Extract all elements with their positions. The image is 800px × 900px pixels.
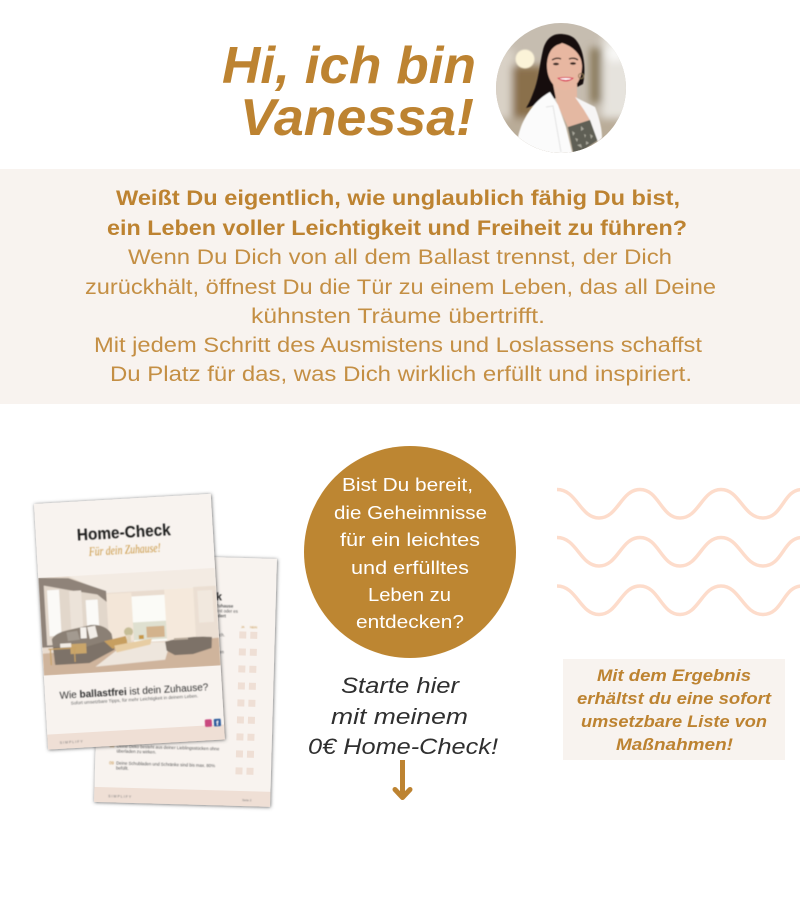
home-check back page: 09 (109, 760, 115, 765)
home-check back page: überladen zu wirken. (116, 749, 156, 755)
home-check front page: f (216, 720, 220, 727)
home-check back page: befüllt. (116, 766, 129, 771)
intro body text: Wenn Du Dich von all dem Ballast trennst, der Dich (128, 246, 672, 269)
home-check back page: NEIN (250, 625, 257, 629)
home-check back page: k (216, 591, 223, 603)
call to action text (308, 673, 498, 759)
intro body text: Du Platz für das, was Dich wirklich erfüllt und inspiriert. (110, 363, 692, 386)
cover heading: Für dein Zuhause! (88, 540, 161, 559)
home-check back page: Seite 2 (242, 798, 252, 802)
question circle: Bist Du bereit, (342, 475, 473, 495)
home-check front page (34, 494, 225, 750)
home-check back page: Zuhause (216, 603, 234, 609)
hair (526, 34, 584, 108)
ottoman (165, 636, 213, 656)
jacket (518, 91, 573, 153)
face (547, 43, 582, 90)
window wall (44, 582, 109, 645)
home-check back page (94, 554, 277, 807)
sofa (51, 624, 113, 656)
intro band (0, 169, 800, 404)
home-check back page: fest oder es (215, 608, 238, 614)
home-check back page: 08 (110, 743, 115, 748)
chest and neck (553, 84, 590, 127)
home-check back page: ffnen (214, 649, 224, 654)
home-check back page: et (212, 734, 216, 739)
home-check back page: ilen. (214, 671, 222, 676)
checkboxes (235, 631, 257, 775)
side table (48, 648, 77, 665)
result callout: umsetzbare Liste von (581, 712, 767, 731)
cover heading (76, 521, 173, 560)
gray wall (38, 574, 109, 648)
question circle: entdecken? (356, 612, 464, 632)
home-check back page: Deine Schubladen und Schränke sind bis max. 80% (116, 761, 215, 768)
title: Vanessa! (240, 89, 474, 147)
question circle: und erfülltes (351, 558, 469, 578)
cover heading: Home-Check (76, 521, 172, 545)
cover room photo (38, 568, 221, 676)
result callout: Maßnahmen! (616, 735, 733, 754)
cover footer (47, 724, 225, 750)
title (222, 37, 476, 147)
call to action text: Starte hier (341, 673, 461, 698)
cover tagline: Sofort umsetzbare Tipps, für mehr Leichtigkeit in deinem Leben. (71, 693, 198, 706)
result callout: erhältst du eine sofort (577, 689, 772, 708)
cover tagline: Wie ballastfrei ist dein Zuhause? (59, 682, 209, 702)
home-check front page: SIMPLIFY (60, 740, 84, 745)
intro headline: Weißt Du eigentlich, wie unglaublich fähig Du bist, (116, 187, 680, 210)
result callout (563, 659, 785, 760)
intro body text (85, 246, 716, 386)
call to action text: 0€ Home-Check! (308, 734, 498, 759)
portrait photo (496, 23, 626, 153)
intro headline: ein Leben voller Leichtigkeit und Freiheit zu führen? (107, 217, 687, 240)
home-check back page: edert (215, 613, 226, 619)
arrow down (395, 760, 410, 798)
intro body text: Mit jedem Schritt des Ausmistens und Loslassens schaffst (94, 334, 702, 357)
home-check back page: t ist (214, 666, 221, 671)
top (568, 120, 598, 152)
home-check back page: Deine Deko besteht aus deiner Lieblingsstücken ohne (117, 744, 220, 751)
intro body text: zurückhält, öffnest Du die Tür zu einem Leben, das all Deine (85, 276, 716, 299)
decorative waves (557, 490, 800, 614)
question circle: Leben zu (368, 585, 451, 605)
home-check back page: SIMPLIFY (108, 794, 132, 799)
floor and rug (42, 638, 221, 676)
question circle: die Geheimnisse (334, 503, 487, 523)
coffee table and flowers (114, 638, 153, 653)
home-check back page: tisch. (215, 632, 225, 637)
home-check back page: te (212, 717, 217, 722)
call to action text: mit meinem (331, 704, 468, 729)
curtains and balcony door (106, 593, 134, 642)
question circle: für ein leichtes (340, 530, 480, 550)
social icons (205, 719, 212, 727)
intro headline (107, 187, 687, 240)
result callout: Mit dem Ergebnis (597, 666, 751, 685)
intro body text: kühnsten Träume übertrifft. (251, 305, 545, 328)
home-check back page: ist (213, 700, 218, 705)
question circle (304, 446, 516, 658)
home-check back page: JA (241, 625, 245, 629)
title: Hi, ich bin (222, 37, 476, 95)
